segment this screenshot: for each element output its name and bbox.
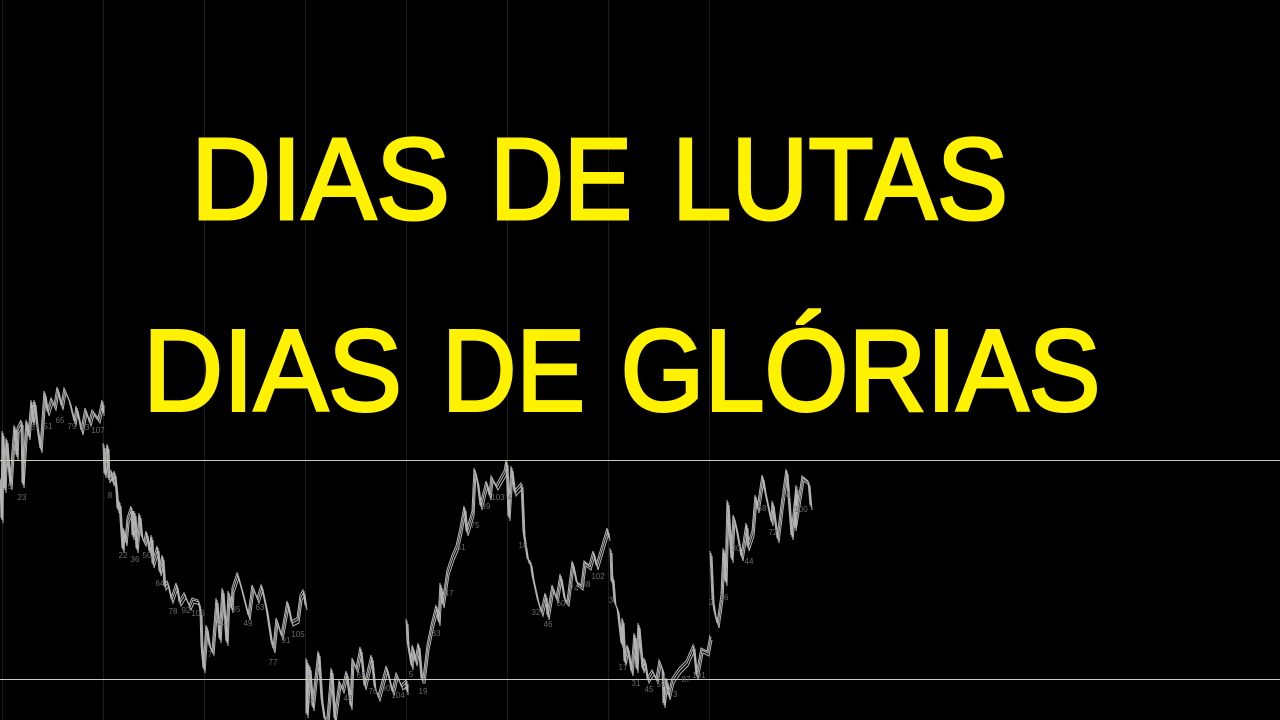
chart bar count labels: 65: [56, 416, 65, 425]
chart bar count labels: 62: [357, 671, 366, 680]
chart bar count labels: 105: [291, 630, 305, 639]
chart bar count labels: 50: [143, 551, 152, 560]
chart bar count labels: 74: [570, 584, 579, 593]
chart bar count labels: 106: [191, 609, 205, 618]
chart bar count labels: 51: [44, 422, 53, 431]
chart bar count labels: 102: [591, 572, 605, 581]
chart bar count labels: 59: [657, 680, 666, 689]
chart bar count labels: 103: [491, 493, 505, 502]
chart bar count labels: 72: [769, 528, 778, 537]
chart bar count labels: 33: [432, 629, 441, 638]
chart bar count labels: 46: [544, 620, 553, 629]
chart bar count labels: 93: [81, 423, 90, 432]
chart bar count labels: 77: [269, 658, 278, 667]
title line 1: LUTAS: [672, 114, 1008, 244]
chart bar count labels: 86: [782, 491, 791, 500]
chart bar count labels: 18: [519, 541, 528, 550]
title line 1: DIAS: [191, 114, 450, 244]
chart bar count labels: 90: [382, 684, 391, 693]
chart bar count labels: 64: [156, 579, 165, 588]
title line 1: [191, 114, 1008, 244]
chart bar count labels: 30: [732, 544, 741, 553]
chart bar count labels: 17: [619, 663, 628, 672]
chart bar count labels: 63: [256, 603, 265, 612]
title line 2: DIAS: [143, 306, 402, 436]
chart bar count labels: 5: [409, 670, 414, 679]
chart bar count labels: 75: [471, 521, 480, 530]
chart bar count labels: 107: [91, 426, 105, 435]
chart bar count labels: 16: [720, 593, 729, 602]
title line 2: [143, 306, 1100, 436]
chart bar count labels: 6: [309, 696, 314, 705]
chart bar count labels: 78: [169, 607, 178, 616]
chart bar count labels: 2: [709, 598, 714, 607]
chart bar count labels: 44: [745, 557, 754, 566]
chart bar count labels: 60: [557, 599, 566, 608]
chart bar count labels: 36: [131, 555, 140, 564]
chart bar count labels: 76: [369, 687, 378, 696]
chart bar count labels: 37: [31, 423, 40, 432]
price chart line: [0, 387, 812, 720]
chart bar count labels: 35: [232, 605, 241, 614]
chart bar count labels: 9: [8, 482, 13, 491]
chart bar count labels: 89: [482, 502, 491, 511]
chart bar count labels: 101: [692, 671, 706, 680]
chart bar count labels: 21: [218, 618, 227, 627]
chart bar count labels: 61: [457, 543, 466, 552]
chart bar count labels: 22: [119, 551, 128, 560]
chart bar count labels: 3: [609, 596, 614, 605]
chart bar count labels: 73: [669, 690, 678, 699]
horizontal level lines: [0, 460, 1280, 680]
chart bar count labels: 92: [182, 606, 191, 615]
title line 1: DE: [490, 114, 632, 244]
chart bar count labels: 79: [68, 422, 77, 431]
title line 2: GLÓRIAS: [620, 306, 1100, 436]
chart bar count labels: 47: [445, 589, 454, 598]
chart bar count labels: 49: [244, 619, 253, 628]
chart bar count labels: [8, 416, 808, 705]
chart bar count labels: 31: [632, 679, 641, 688]
chart bar count labels: 58: [758, 504, 767, 513]
chart bar count labels: 87: [682, 675, 691, 684]
chart bar count labels: 23: [18, 493, 27, 502]
chart bar count labels: 8: [108, 491, 113, 500]
chart bar count labels: 45: [645, 685, 654, 694]
chart bar count labels: 100: [794, 505, 808, 514]
chart bar count labels: 48: [344, 694, 353, 703]
chart bar count labels: 88: [582, 580, 591, 589]
chart bar count labels: 32: [532, 608, 541, 617]
chart bar count labels: 91: [282, 636, 291, 645]
chart bar count labels: 7: [208, 650, 213, 659]
chart bar count labels: 4: [508, 493, 513, 502]
chart bar count labels: 19: [419, 687, 428, 696]
title line 2: DE: [442, 306, 585, 436]
title: [143, 114, 1100, 436]
chart bar count labels: 104: [391, 691, 405, 700]
